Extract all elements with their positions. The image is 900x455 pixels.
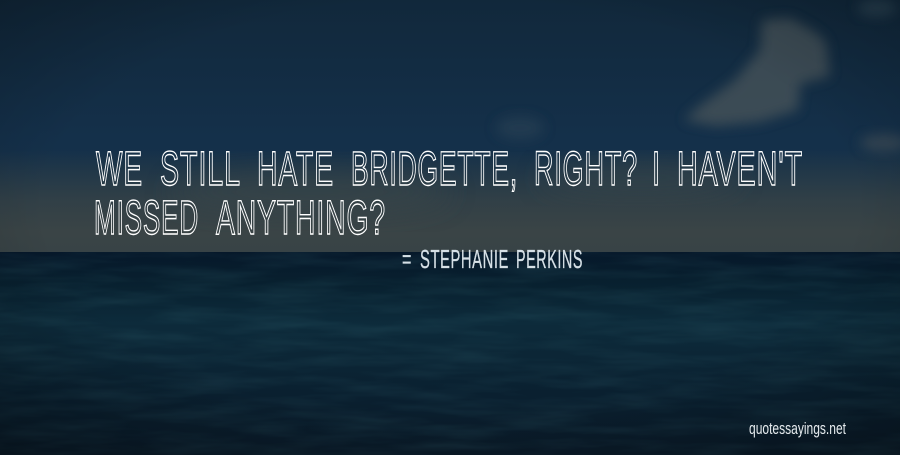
background: sea — [0, 252, 900, 455]
quote line 1: HATE — [257, 143, 334, 196]
author attribution: = — [402, 244, 412, 274]
quote line 1: WE — [96, 143, 143, 196]
cloud: right edge — [860, 134, 900, 152]
site watermark: quotessayings.net — [749, 419, 846, 438]
quote line 2: ANYTHING? — [216, 192, 386, 245]
cloud: top corner — [857, 0, 897, 17]
quote line 1: BRIDGETTE, — [351, 143, 518, 196]
quote line 1 — [96, 143, 803, 196]
quote line 2 — [94, 192, 386, 245]
quote line 1: I — [652, 143, 661, 196]
cloud: upper right — [684, 18, 830, 126]
author attribution: PERKINS — [516, 244, 583, 274]
author attribution: STEPHANIE — [420, 244, 509, 274]
quote line 1: STILL — [160, 143, 241, 196]
quote line 1: RIGHT? — [534, 143, 638, 196]
quote line 2: MISSED — [94, 192, 199, 245]
quote line 1: HAVEN'T — [677, 143, 803, 196]
background: sky — [0, 0, 900, 252]
quote text — [94, 143, 803, 245]
cloud: small faint — [496, 116, 544, 140]
